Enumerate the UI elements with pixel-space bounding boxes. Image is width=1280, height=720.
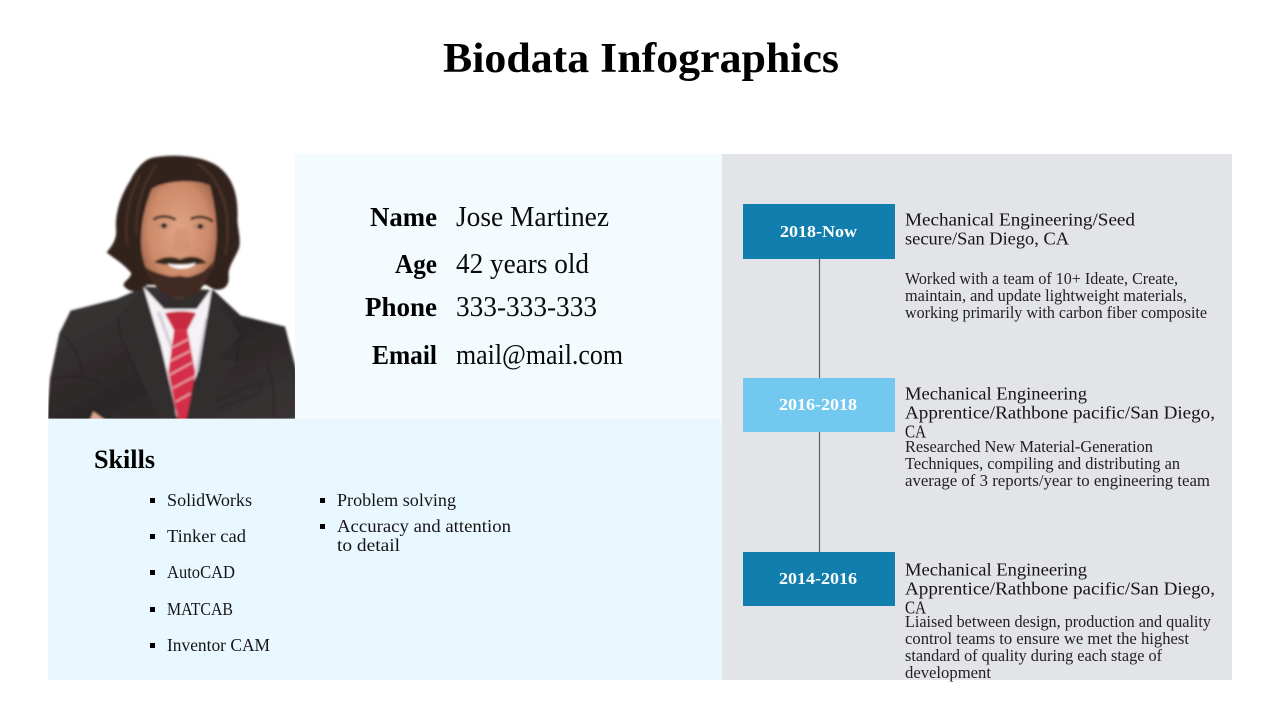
timeline entry: 2018-Now: secure/San Diego, CA <box>905 229 1069 249</box>
timeline entry: 2014-2016: Liaised between design, production and quality <box>905 612 1212 631</box>
timeline entry: 2014-2016: standard of quality during each stage of <box>905 646 1162 665</box>
timeline entry: 2018-Now: 2018-Now <box>780 222 857 241</box>
timeline entry: 2016-2018 <box>743 378 1215 490</box>
timeline entry: 2018-Now: Mechanical Engineering/Seed <box>905 210 1135 230</box>
timeline entry: 2014-2016: Apprentice/Rathbone pacific/San Diego, <box>905 579 1215 599</box>
timeline entry: 2016-2018: Techniques, compiling and distributing an <box>905 454 1180 473</box>
field: age: 42 years old <box>456 249 589 280</box>
skills heading: Skills <box>94 445 155 474</box>
field: name <box>370 202 609 233</box>
timeline entry: 2016-2018: average of 3 reports/year to engineering team <box>905 471 1210 490</box>
field: email: mail@mail.com <box>456 340 623 371</box>
timeline entry: 2018-Now <box>743 204 1207 322</box>
title: Biodata Infographics <box>443 36 839 82</box>
timeline entry: 2018-Now: Worked with a team of 10+ Ideate, Create, <box>905 269 1178 288</box>
timeline entry: 2014-2016: control teams to ensure we met the highest <box>905 629 1189 648</box>
skills list: column two: to detail <box>337 535 400 555</box>
timeline entry: 2014-2016: development <box>905 663 991 682</box>
field: email <box>372 340 623 371</box>
timeline entry: 2016-2018: CA <box>905 422 926 442</box>
panel: personal details <box>295 154 722 419</box>
field: phone: Phone <box>365 292 437 322</box>
timeline connector <box>818 259 820 552</box>
skills list: column one: AutoCAD <box>167 562 235 582</box>
timeline entry: 2014-2016: Mechanical Engineering <box>905 560 1087 580</box>
field: age: Age <box>395 249 437 279</box>
timeline entry: 2014-2016: 2014-2016 <box>779 569 857 588</box>
skills list: column one: MATCAB <box>167 599 233 619</box>
timeline entry: 2014-2016 <box>743 552 1215 682</box>
field: phone <box>365 292 597 323</box>
skills list: column one: Inventor CAM <box>167 635 270 655</box>
skills list: column two <box>320 490 511 555</box>
field: phone: 333-333-333 <box>456 292 597 323</box>
skills list: column two: Accuracy and attention <box>337 516 511 536</box>
skills list: column two: Problem solving <box>337 490 456 510</box>
field: name: Name <box>370 202 437 232</box>
field: age <box>395 249 589 280</box>
skills list: column one: Tinker cad <box>167 526 246 546</box>
skills list: column one <box>150 490 270 655</box>
timeline entry: 2016-2018: Mechanical Engineering <box>905 384 1087 404</box>
field: name: Jose Martinez <box>456 202 609 233</box>
timeline entry: 2014-2016: CA <box>905 598 926 618</box>
timeline entry: 2018-Now: working primarily with carbon fiber composite <box>905 303 1207 322</box>
timeline entry: 2016-2018: Apprentice/Rathbone pacific/San Diego, <box>905 403 1215 423</box>
field: email: Email <box>372 340 437 370</box>
timeline entry: 2016-2018: Researched New Material-Generation <box>905 437 1153 456</box>
panel: career timeline <box>722 154 1232 682</box>
timeline entry: 2018-Now: maintain, and update lightweight materials, <box>905 286 1187 305</box>
skills list: column one: SolidWorks <box>167 490 252 510</box>
panel: skills <box>48 419 722 680</box>
timeline entry: 2016-2018: 2016-2018 <box>779 395 857 414</box>
portrait photo <box>47 156 297 422</box>
